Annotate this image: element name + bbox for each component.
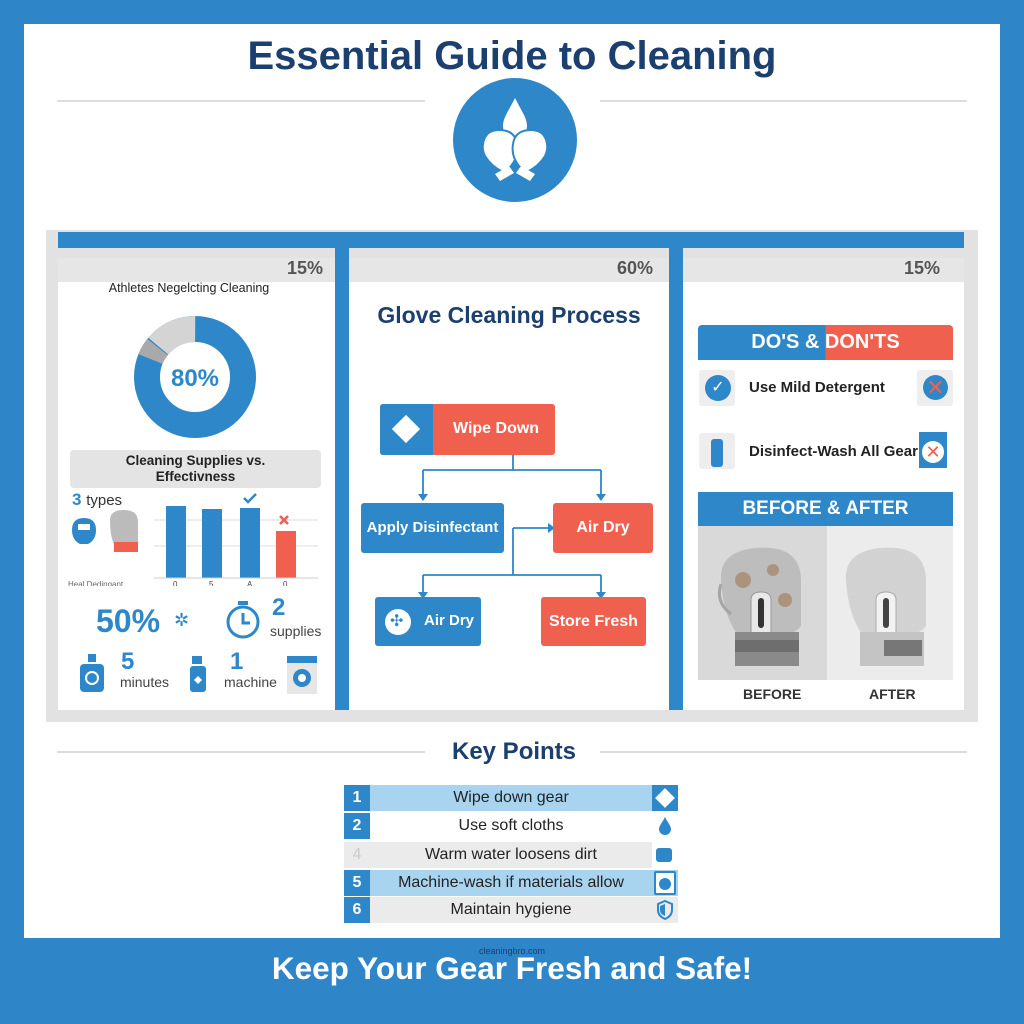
panels area	[46, 230, 978, 722]
panel: dos and donts: Disinfect-Wash All Gear	[749, 443, 918, 460]
dos header	[698, 325, 953, 360]
donut chart	[134, 316, 256, 438]
panel: process: 60%	[617, 258, 653, 278]
panel: dos and donts: AFTER	[869, 686, 916, 702]
glove after	[846, 548, 926, 666]
text: Keep Your Gear Fresh and Safe!	[272, 950, 752, 986]
box: air dry blue: ✣	[390, 613, 403, 630]
key points list: 1	[353, 789, 361, 806]
icon: timer	[226, 601, 260, 638]
before and after: BEFORE & AFTER	[742, 498, 909, 519]
key points list: 4	[353, 846, 361, 863]
key points list	[344, 785, 678, 923]
key points list: Wipe down gear	[453, 789, 569, 806]
box: wipe down	[380, 404, 555, 455]
chart header: Effectivness	[156, 469, 235, 484]
panel: statistics: Athletes Negelcting Cleaning	[109, 281, 269, 295]
key points list: Maintain hygiene	[451, 901, 571, 918]
box: wipe down: Wipe Down	[453, 420, 539, 437]
before and after	[698, 492, 953, 526]
box: air dry blue	[375, 597, 481, 646]
chart header	[70, 450, 321, 488]
chart header: Cleaning Supplies vs.	[126, 453, 265, 468]
icon: washer	[287, 656, 317, 694]
donut chart: 80%	[171, 365, 219, 392]
box: apply disinfectant	[361, 503, 504, 553]
title: Essential Guide to Cleaning	[248, 34, 776, 78]
key points list: Machine-wash if materials allow	[398, 874, 624, 891]
box: apply disinfectant: Apply Disinfectant	[367, 519, 498, 536]
panel: dos and donts	[683, 258, 964, 710]
flowchart	[418, 455, 606, 597]
box: air dry red	[553, 503, 653, 553]
key points list: 5	[353, 874, 361, 891]
panel: dos and donts: ✓	[711, 379, 725, 396]
key points list: 6	[353, 901, 361, 918]
box: air dry blue: Air Dry	[424, 612, 474, 629]
panel: statistics: ✲	[174, 610, 189, 630]
panel: statistics: 1	[230, 648, 243, 675]
key points list: 2	[353, 817, 361, 834]
icon: gloves and water drop	[453, 78, 577, 202]
box: store fresh	[541, 597, 646, 646]
panel: statistics: machine	[224, 674, 277, 690]
panel: dos and donts: Use Mild Detergent	[749, 379, 885, 396]
panel: statistics: 3 types	[72, 490, 122, 509]
key points list: Warm water loosens dirt	[425, 846, 597, 863]
panel: dos and donts: BEFORE	[743, 686, 801, 702]
panel: dos and donts: ✕	[925, 442, 941, 462]
key points heading: Key Points	[452, 738, 576, 765]
panel: statistics: supplies	[270, 623, 321, 639]
panel: process: Glove Cleaning Process	[377, 302, 641, 328]
icon: spray	[190, 656, 206, 692]
panel: process	[349, 258, 669, 710]
dos header: DO'S & DON'TS	[751, 331, 900, 353]
panel: statistics: 50%	[96, 603, 160, 639]
panel: statistics: minutes	[120, 674, 169, 690]
box: store fresh: Store Fresh	[549, 613, 638, 630]
footer: cleaningbro.com	[479, 946, 545, 956]
panel: statistics: 2	[272, 594, 285, 621]
icon: bottle	[80, 654, 104, 692]
glove before	[718, 548, 801, 666]
panel: statistics: 5	[121, 648, 134, 675]
box: air dry red: Air Dry	[576, 519, 630, 536]
panel: dos and donts: 15%	[904, 258, 940, 278]
panel: statistics: 15%	[287, 258, 323, 278]
panel: dos and donts: ✕	[926, 375, 945, 400]
bar chart	[68, 493, 318, 586]
key points list: Use soft cloths	[459, 817, 563, 834]
panel: statistics	[58, 258, 335, 710]
